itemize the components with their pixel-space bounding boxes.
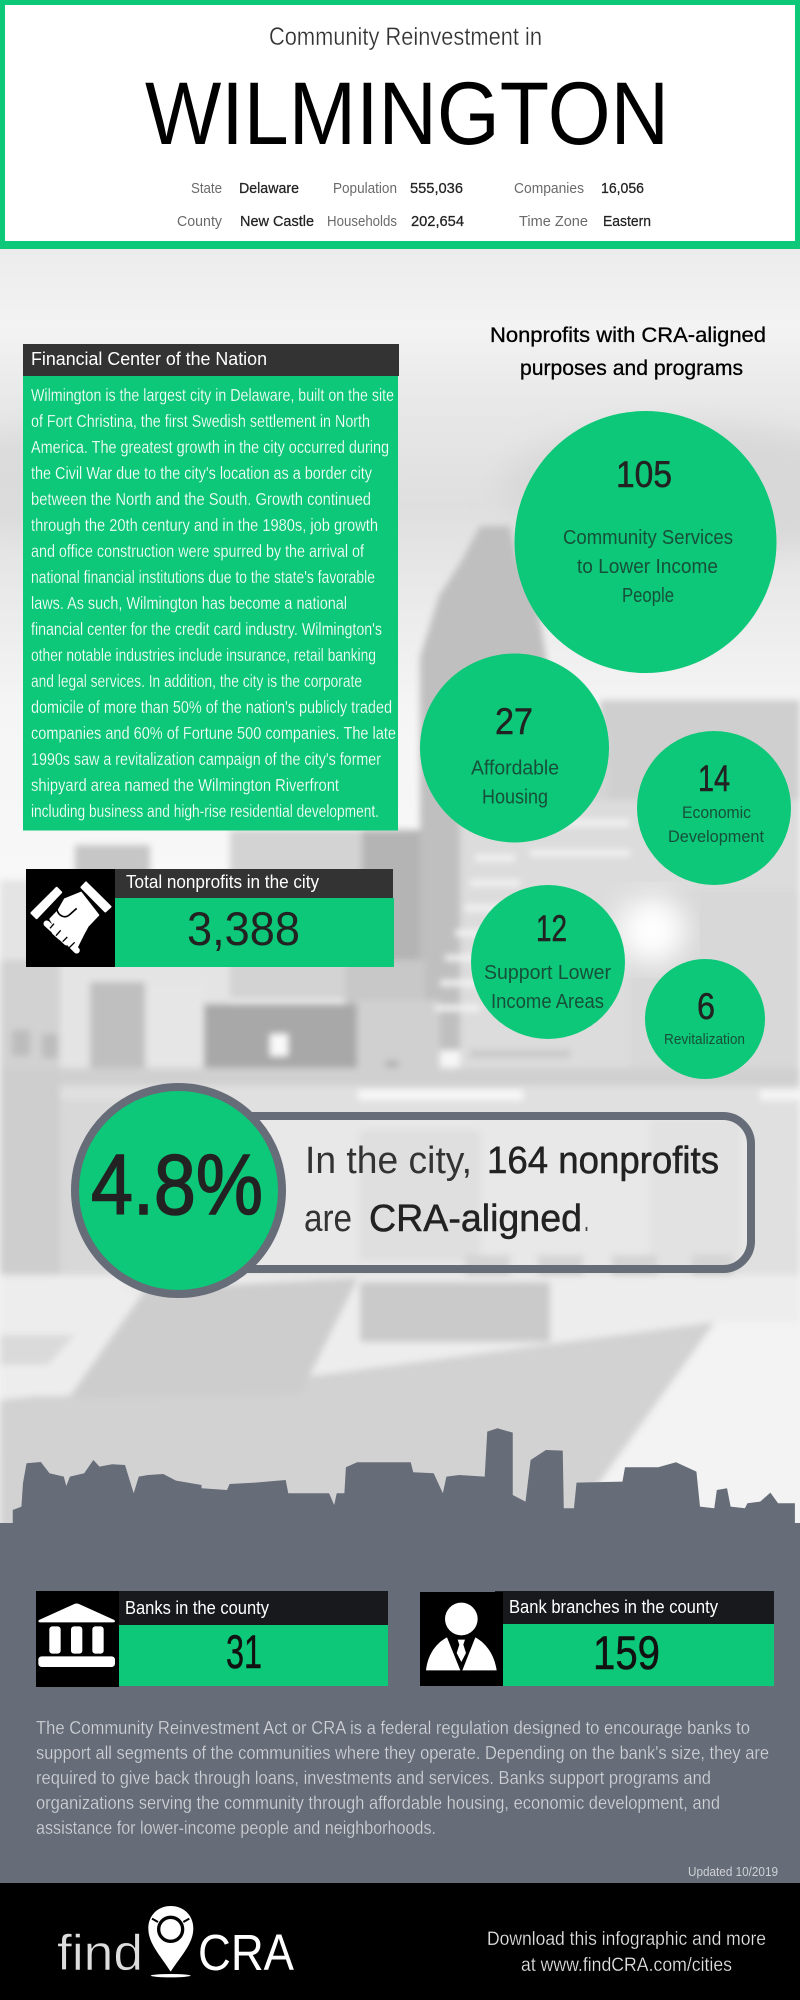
stat value: 3,388 (187, 902, 300, 955)
city facts: Time Zone (519, 213, 588, 230)
bubble: community services: to Lower Income (577, 556, 718, 578)
icon: person in suit (426, 1603, 497, 1670)
bubble: affordable housing: 27 (495, 701, 533, 742)
bubble: community services: 105 (616, 454, 672, 495)
callout: 4.8% CRA-aligned (75, 1087, 751, 1294)
stat label: Banks in the county (125, 1598, 269, 1618)
stat: bank branches in the county (420, 1591, 774, 1686)
body text: domicile of more than 50% of the nation's publicly traded (31, 697, 392, 717)
body text: national financial institutions due to the state's favorable (31, 567, 375, 587)
bubble: economic development: Development (668, 827, 764, 846)
callout text: . (584, 1198, 589, 1240)
bubble: economic development: 14 (698, 758, 730, 799)
city facts: Population (333, 180, 397, 197)
city facts: Delaware (239, 180, 299, 197)
panel: financial center of the nation (23, 344, 399, 830)
callout text: are (304, 1198, 352, 1240)
icon: location pin with person (148, 1906, 193, 1977)
callout text: In the city, (305, 1140, 472, 1182)
panel heading: Financial Center of the Nation (31, 349, 267, 369)
bubble: revitalization: 6 (697, 986, 715, 1027)
body text: America. The greatest growth in the city occurred during (31, 437, 389, 457)
bubble: community services (514, 411, 776, 673)
city facts: County (177, 213, 222, 230)
city facts (177, 180, 651, 230)
city title: WILMINGTON (145, 63, 669, 163)
bubble: support lower income areas: 12 (536, 908, 567, 949)
body text: and legal services. In addition, the city is the corporate (31, 671, 362, 691)
bubble: revitalization: Revitalization (664, 1031, 745, 1048)
update date: Updated 10/2019 (688, 1864, 778, 1879)
callout text (304, 1140, 719, 1240)
callout percentage: 4.8% (91, 1138, 263, 1233)
stat: total nonprofits (26, 869, 394, 967)
logo: findCRA (57, 1906, 294, 1981)
callout text: CRA-aligned (369, 1198, 582, 1240)
CRA explanation text: assistance for lower-income people and neighborhoods. (36, 1818, 436, 1838)
stat value: 159 (593, 1626, 660, 1679)
body text: other notable industries include insurance, retail banking (31, 645, 376, 665)
CRA explanation text: The Community Reinvestment Act or CRA is a federal regulation designed to encourage banks to (36, 1718, 750, 1738)
download call to action: at www.findCRA.com/cities (521, 1955, 732, 1976)
city facts: State (191, 180, 222, 197)
body text: financial center for the credit card industry. Wilmington's (31, 619, 382, 639)
body text: between the North and the South. Growth continued (31, 489, 371, 509)
icon: bank building (38, 1603, 115, 1667)
logo: findCRA: find (57, 1925, 143, 1981)
body text: laws. As such, Wilmington has become a national (31, 593, 347, 613)
bubble: community services: Community Services (563, 527, 733, 549)
city facts: 202,654 (411, 213, 464, 230)
body text: including business and high-rise residential development. (31, 801, 379, 821)
stat label: Bank branches in the county (509, 1597, 718, 1617)
download call to action (487, 1929, 766, 1976)
CRA explanation text: organizations serving the community through affordable housing, economic development, and (36, 1793, 720, 1813)
body text: 1990s saw a revitalization campaign of the city's former (31, 749, 381, 769)
bubble: economic development: Economic (682, 803, 751, 822)
body text: Wilmington is the largest city in Delaware, built on the site (31, 385, 394, 405)
city facts: 16,056 (601, 180, 644, 197)
heading: nonprofits with CRA-aligned purposes (490, 324, 766, 380)
body text (31, 385, 396, 821)
city facts: 555,036 (410, 180, 463, 197)
body text: and office construction were spurred by the arrival of (31, 541, 364, 561)
body text: the Civil War due to the city's location as a border city (31, 463, 372, 483)
body text: of Fort Christina, the first Swedish settlement in North (31, 411, 370, 431)
body text: through the 20th century and in the 1980s, job growth (31, 515, 378, 535)
CRA explanation text: required to give back through loans, investments and services. Banks support programs and (36, 1768, 711, 1788)
bubble: revitalization (645, 959, 765, 1079)
heading: nonprofits with CRA-aligned purposes: purposes and programs (520, 357, 743, 380)
city facts: Companies (514, 180, 584, 197)
panel: slate banks section (0, 1523, 800, 1883)
icon: handshake (32, 883, 110, 950)
bubble: economic development (637, 731, 791, 885)
heading: nonprofits with CRA-aligned purposes: Nonprofits with CRA-aligned (490, 324, 766, 347)
logo: findCRA: CRA (198, 1924, 294, 1981)
header panel (0, 2, 800, 249)
body text: companies and 60% of Fortune 500 companies. The late (31, 723, 396, 743)
stat value: 31 (226, 1625, 262, 1678)
header subtitle: Community Reinvestment in (269, 23, 542, 51)
city facts: Households (327, 213, 397, 230)
background photo: grey city plaza (0, 249, 800, 1535)
bubble: community services: People (622, 585, 674, 607)
bubble: affordable housing: Affordable (471, 758, 559, 780)
download call to action: Download this infographic and more (487, 1929, 766, 1950)
stat: banks in the county (36, 1591, 388, 1687)
bubble: affordable housing: Housing (482, 786, 548, 808)
callout text: 164 nonprofits (487, 1140, 719, 1182)
CRA explanation text (36, 1718, 769, 1838)
stat label: Total nonprofits in the city (126, 872, 319, 892)
bubble: support lower income areas: Support Lower (484, 962, 611, 984)
footer (0, 1883, 800, 2000)
bubble: support lower income areas (471, 885, 625, 1039)
body text: shipyard area named the Wilmington Riverfront (31, 775, 339, 795)
bubble: support lower income areas: Income Areas (491, 991, 604, 1013)
city skyline silhouette (13, 1428, 795, 1527)
city facts: New Castle (240, 213, 314, 230)
city facts: Eastern (603, 213, 651, 230)
bubble: affordable housing (420, 654, 609, 842)
